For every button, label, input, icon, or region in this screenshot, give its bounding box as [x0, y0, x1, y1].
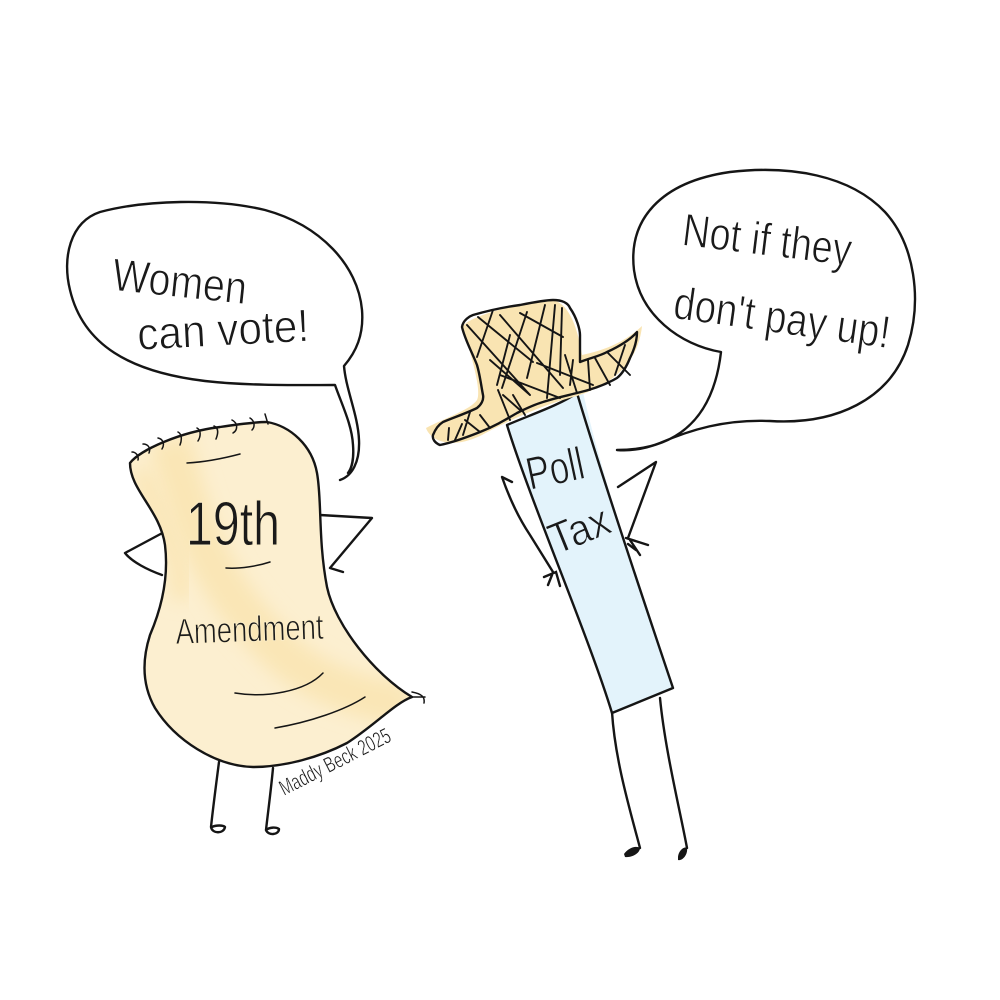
scroll stitches: [132, 414, 425, 703]
character: Poll Tax: [502, 392, 687, 860]
scroll body: [130, 422, 412, 767]
cartoon illustration: [66, 168, 916, 860]
speech bubble: women can vote: Women: [110, 248, 250, 314]
scroll legs: [211, 762, 279, 834]
scroll text: 19th: [186, 490, 280, 559]
straw hat: [426, 300, 642, 445]
scroll arms: [125, 515, 372, 575]
poll tax legs: [612, 698, 687, 848]
artist signature: Maddy Beck 2025: [275, 723, 395, 800]
poll tax arms: [502, 462, 656, 572]
scroll lines: [187, 454, 365, 728]
speech bubble: not if they don't pay up: [617, 170, 915, 450]
speech bubble: women can vote: [67, 202, 362, 480]
poll tax feet: [624, 847, 687, 860]
character: 19th Amendment scroll: Amendment: [175, 606, 324, 652]
speech bubble: not if they don't pay up: Not if they: [680, 203, 855, 276]
poll tax hands: [544, 538, 648, 586]
poll tax text: Poll: [521, 437, 589, 500]
character: Poll Tax: Tax: [541, 496, 617, 564]
character: 19th Amendment scroll: [125, 414, 425, 834]
speech bubble: not if they don't pay up: don't pay up!: [671, 276, 894, 358]
speech bubble: women can vote: can vote!: [136, 299, 310, 360]
hat wash: [426, 300, 642, 443]
poll tax body: [507, 392, 673, 713]
